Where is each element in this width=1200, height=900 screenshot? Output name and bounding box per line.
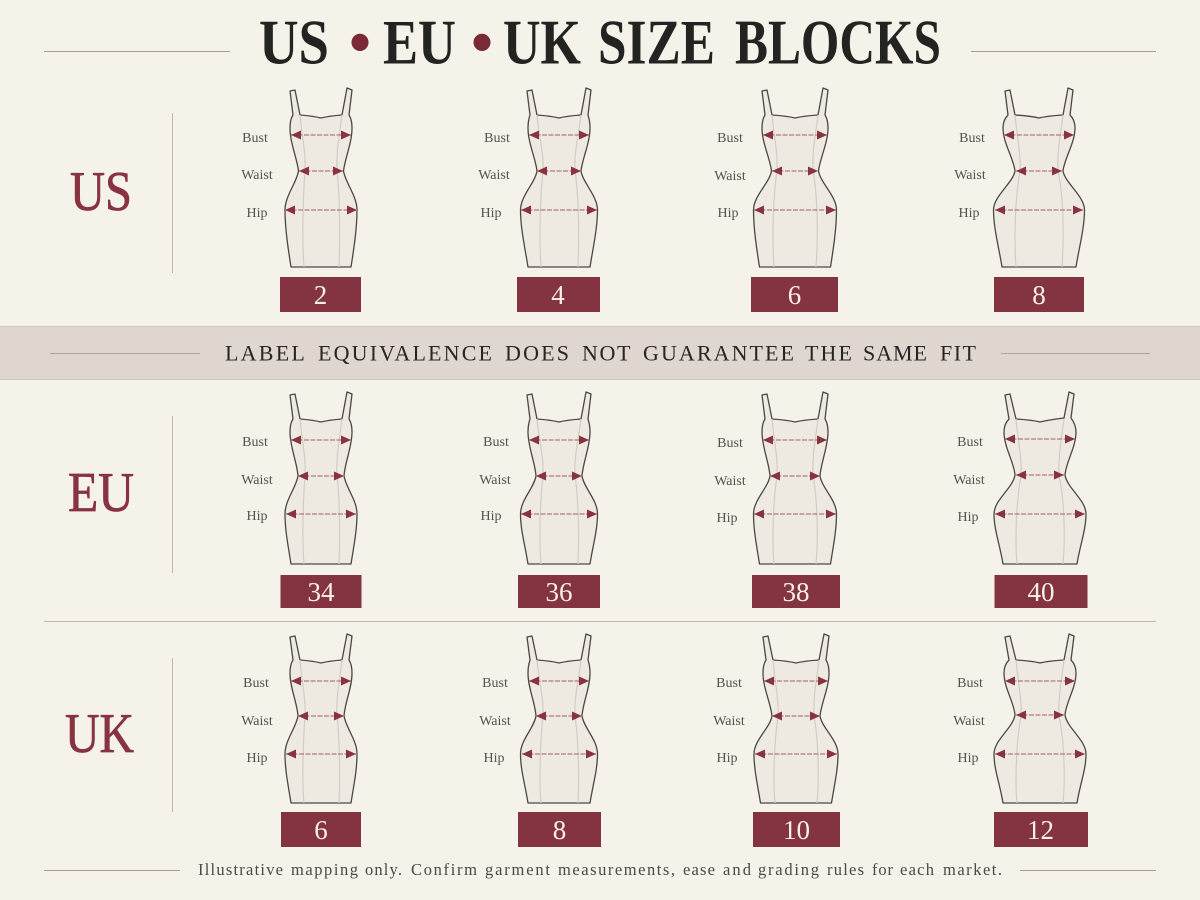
UK size 8 xyxy=(479,634,601,847)
US size 6: Hip xyxy=(718,206,738,221)
banner: label equivalence: THE xyxy=(805,340,852,366)
EU size 36: Hip xyxy=(480,509,502,524)
title: SIZE xyxy=(598,8,715,78)
EU size 40: Hip xyxy=(958,510,978,525)
UK size 10: Hip xyxy=(716,751,738,766)
row label: EU: EU xyxy=(68,462,134,524)
footer note: garment xyxy=(485,860,550,879)
EU size 34: 34 xyxy=(308,577,335,607)
EU size 40: Waist xyxy=(953,473,985,488)
US size 2: Waist xyxy=(241,168,273,183)
EU size 38: Bust xyxy=(717,436,743,451)
title xyxy=(44,8,1156,78)
UK size 6 xyxy=(241,634,361,847)
UK size 10 xyxy=(713,634,840,847)
US size 4 xyxy=(478,88,600,312)
UK size 10: 10 xyxy=(783,815,810,845)
US size 4: Waist xyxy=(478,168,510,183)
EU size 38: 38 xyxy=(782,577,810,607)
banner: label equivalence: FIT xyxy=(940,340,977,366)
UK size 12: 12 xyxy=(1027,815,1054,845)
banner: label equivalence: SAME xyxy=(863,340,927,366)
EU size 40 xyxy=(953,392,1088,608)
EU size 34 xyxy=(241,392,362,608)
UK size 8: 8 xyxy=(553,815,566,845)
footer note: for xyxy=(872,860,894,879)
title: • xyxy=(471,8,493,78)
title: US xyxy=(259,8,329,78)
US size 4: Bust xyxy=(484,131,510,146)
footer note xyxy=(44,860,1156,879)
UK size 10: Waist xyxy=(713,714,745,729)
row label: US: US xyxy=(70,161,132,223)
UK size 10: Bust xyxy=(716,676,742,691)
footer note: market. xyxy=(943,860,1002,879)
US size 2: Hip xyxy=(246,206,268,221)
UK size 8: Hip xyxy=(484,751,504,766)
EU size 34: Bust xyxy=(242,435,268,450)
footer note: measurements, xyxy=(558,860,675,879)
UK size 12 xyxy=(953,634,1088,847)
EU size 34: Hip xyxy=(246,509,268,524)
banner: label equivalence: NOT xyxy=(582,340,631,366)
US size 8: Waist xyxy=(954,168,986,183)
EU size 36 xyxy=(479,392,600,608)
EU size 38: Waist xyxy=(714,474,746,489)
UK size 12: Bust xyxy=(957,676,983,691)
UK size 6: Waist xyxy=(241,714,273,729)
title: • xyxy=(349,8,371,78)
title: UK xyxy=(503,8,581,78)
UK size 6: Hip xyxy=(246,751,268,766)
row label: UK: UK xyxy=(65,703,134,765)
US size 8 xyxy=(954,88,1084,312)
US size 6: Bust xyxy=(717,131,743,146)
title: BLOCKS xyxy=(735,8,941,78)
footer note: mapping xyxy=(291,860,358,879)
US size 6 xyxy=(714,88,838,312)
banner: label equivalence: GUARANTEE xyxy=(643,340,794,366)
US size 2: Bust xyxy=(242,131,268,146)
UK size 8: Waist xyxy=(479,714,511,729)
footer note: and xyxy=(723,860,752,879)
UK size 6: Bust xyxy=(243,676,269,691)
footer note: ease xyxy=(683,860,715,879)
EU size 40: Bust xyxy=(957,435,983,450)
EU size 40: 40 xyxy=(1028,577,1054,607)
US size 4: Hip xyxy=(480,206,502,221)
panel: UK row xyxy=(65,634,1088,847)
UK size 6: 6 xyxy=(314,815,328,845)
UK size 8: Bust xyxy=(482,676,508,691)
UK size 12: Waist xyxy=(953,714,985,729)
banner: label equivalence: DOES xyxy=(505,340,569,366)
UK size 12: Hip xyxy=(958,751,978,766)
EU size 36: Waist xyxy=(479,473,511,488)
EU size 36: Bust xyxy=(483,435,509,450)
panel: US row xyxy=(70,88,1084,312)
title: EU xyxy=(383,8,456,78)
US size 8: Bust xyxy=(959,131,985,146)
banner: label equivalence: LABEL xyxy=(225,340,304,366)
footer note: Confirm xyxy=(411,860,477,879)
panel: EU row xyxy=(68,392,1088,608)
EU size 38: Hip xyxy=(716,511,738,526)
US size 8: Hip xyxy=(958,206,980,221)
EU size 38 xyxy=(714,392,840,608)
footer note: rules xyxy=(827,860,864,879)
US size 4: 4 xyxy=(551,280,565,310)
US size 2 xyxy=(241,88,361,312)
US size 2: 2 xyxy=(314,280,327,310)
US size 6: 6 xyxy=(788,280,801,310)
US size 6: Waist xyxy=(714,169,746,184)
footer note: only. xyxy=(365,860,402,879)
banner: label equivalence: EQUIVALENCE xyxy=(318,340,492,366)
footer note: grading xyxy=(758,860,819,879)
EU size 34: Waist xyxy=(241,473,273,488)
banner: label equivalence xyxy=(0,326,1200,380)
EU size 36: 36 xyxy=(546,577,572,607)
footer note: each xyxy=(900,860,935,879)
footer note: Illustrative xyxy=(198,860,283,879)
US size 8: 8 xyxy=(1032,280,1046,310)
